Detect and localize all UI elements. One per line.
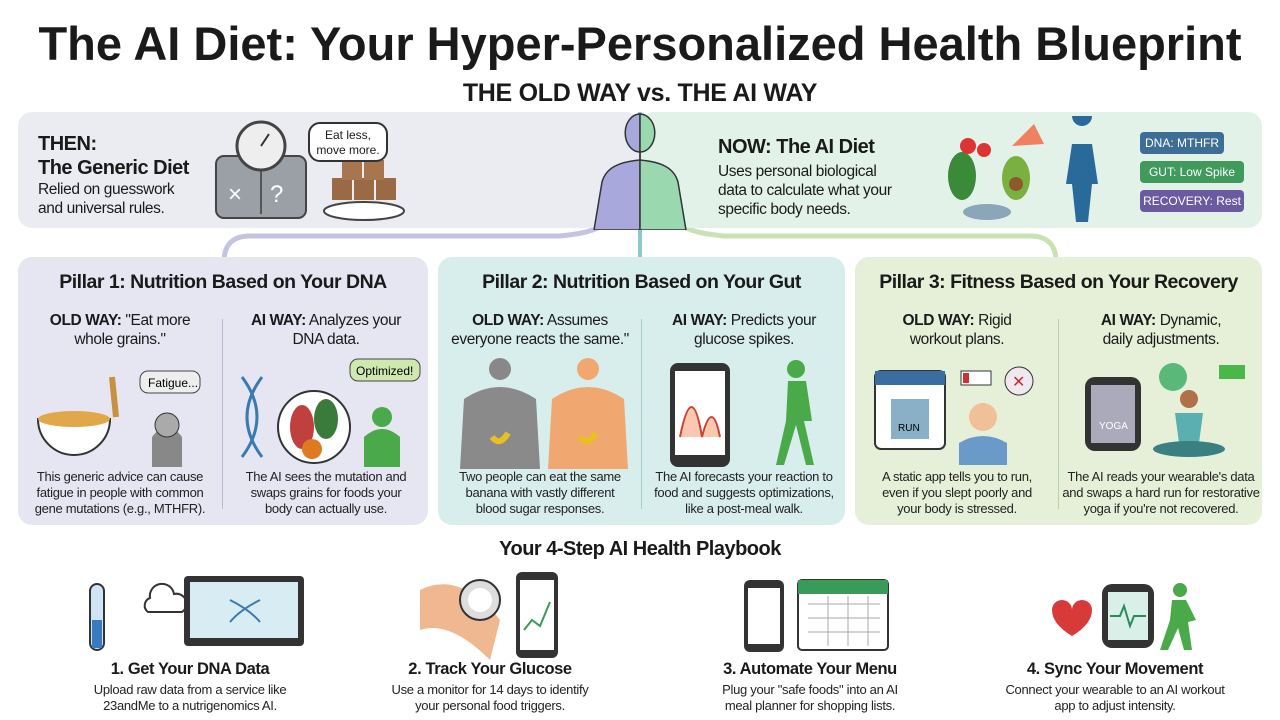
text: p1 ai desc: body can actually use. (265, 501, 387, 516)
text: p2 old desc: Two people can eat the same (459, 469, 621, 484)
text: p3 old desc: even if you slept poorly and (882, 485, 1032, 500)
text: p1 ai desc: swaps grains for foods your (251, 485, 401, 500)
icon: calendar and tired person (874, 366, 1034, 465)
text: step 2: 2. Track Your Glucose (408, 660, 572, 678)
icon: two bodies with bananas (460, 358, 628, 469)
text: p1 ai desc: The AI sees the mutation and (246, 469, 406, 484)
text: p2 ai desc: food and suggests optimizations, (654, 485, 834, 500)
tag: GUT (1140, 161, 1244, 183)
text: step 3: Plug your "safe foods" into an AI (722, 682, 898, 697)
text: step 2: your personal food triggers. (415, 698, 565, 713)
text: p3 ai desc: and swaps a hard run for restorative (1062, 485, 1260, 500)
callout: eat less: Eat less, (325, 128, 371, 142)
heading: pillar 2: Pillar 2: Nutrition Based on Your Gut (482, 271, 801, 293)
text: p2 ai desc: The AI forecasts your reaction to (655, 469, 833, 484)
panel: now (640, 112, 1262, 228)
icon: heart watch runner (1052, 583, 1196, 650)
icon: glucose monitor (420, 572, 558, 660)
text: p1 old desc (35, 469, 205, 516)
text: step 2 (391, 660, 589, 713)
text: p1 old desc: fatigue in people with common (37, 485, 203, 500)
text: p3 ai desc (1062, 469, 1260, 516)
text: p3 old desc: your body is stressed. (897, 501, 1017, 516)
panel: then (18, 112, 640, 228)
text: step 4: 4. Sync Your Movement (1027, 660, 1203, 678)
heading: then: The Generic Diet (38, 157, 189, 179)
text: p1 old way: whole grains." (74, 331, 166, 348)
icon: phone and walker (670, 360, 814, 467)
text: step 1: Upload raw data from a service like (94, 682, 286, 697)
text: p1 old way (50, 312, 190, 348)
callout: eat less (308, 122, 388, 162)
text: step 1: 1. Get Your DNA Data (111, 660, 269, 678)
heading: now: NOW: The AI Diet (718, 136, 874, 158)
icon: calendar and tired person: ✕ (1012, 374, 1025, 391)
text: p1 ai way: DNA data. (292, 331, 360, 348)
text: step 3 (722, 660, 898, 713)
text: step 2: Use a monitor for 14 days to identify (391, 682, 588, 697)
panel: pillar 1 (18, 257, 428, 525)
icon: scale: ? (270, 181, 283, 208)
panel: pillar 3 (855, 257, 1262, 525)
tag: DNA: DNA: MTHFR (1145, 136, 1219, 150)
step 1 (89, 576, 304, 713)
text: p1 old way: OLD WAY: "Eat more (50, 312, 190, 329)
text: step 4: app to adjust intensity. (1054, 698, 1176, 713)
step 3 (722, 579, 898, 713)
icon: bowl and tired person: Fatigue... (148, 376, 198, 390)
text: p1 ai way (251, 312, 402, 348)
panel: pillar 2 (438, 257, 845, 525)
icon: scale: × (228, 181, 242, 208)
text: step 1: 23andMe to a nutrigenomics AI. (103, 698, 277, 713)
text: now: Uses personal biological (718, 163, 876, 180)
text: p3 old way: workout plans. (910, 331, 1004, 348)
heading: playbook: Your 4-Step AI Health Playbook (499, 538, 781, 560)
tag: GUT: GUT: Low Spike (1149, 165, 1235, 179)
text: p2 old way: everyone reacts the same." (451, 331, 629, 348)
icon: bowl and tired person (37, 370, 200, 467)
icon: scale (215, 120, 405, 221)
icon: watch and yoga: YOGA (1099, 421, 1128, 432)
text: now: data to calculate what your (718, 182, 892, 199)
tag: RECOVERY: RECOVERY: Rest (1143, 194, 1241, 208)
text: p3 old desc: A static app tells you to run, (882, 469, 1032, 484)
text: p3 ai desc: yoga if you're not recovered. (1084, 501, 1238, 516)
icon: dna plate person (240, 358, 420, 467)
heading: then (38, 133, 190, 179)
heading: pillar 3: Pillar 3: Fitness Based on Your Recovery (879, 271, 1238, 293)
tag: RECOVERY (1140, 190, 1244, 212)
text: p2 ai way (672, 312, 816, 348)
icon: human silhouette (593, 113, 687, 230)
icon: calendar and tired person: RUN (898, 423, 920, 434)
text: p2 ai desc: like a post-meal walk. (685, 501, 803, 516)
text: step 1 (94, 660, 286, 713)
text: then (38, 181, 175, 217)
callout: eat less: move more. (316, 143, 380, 157)
text: step 4: Connect your wearable to an AI workout (1005, 682, 1225, 697)
text: now: specific body needs. (718, 201, 850, 218)
text: p2 ai way: AI WAY: Predicts your (672, 312, 816, 329)
text: step 4 (1005, 660, 1225, 713)
text: p2 ai way: glucose spikes. (694, 331, 794, 348)
title: The AI Diet: Your Hyper-Personalized Health Blueprint (38, 17, 1242, 70)
text: p1 ai desc (246, 469, 406, 516)
text: p3 ai way: AI WAY: Dynamic, (1101, 312, 1221, 329)
text: p3 ai desc: The AI reads your wearable's data (1068, 469, 1254, 484)
icon: dna upload (89, 576, 304, 651)
text: p2 old desc (459, 469, 621, 516)
icon: foods and body (948, 116, 1098, 222)
tag: DNA (1140, 132, 1224, 154)
text: p3 ai way (1101, 312, 1221, 348)
text: p3 old way (903, 312, 1011, 348)
text: step 3: 3. Automate Your Menu (723, 660, 897, 678)
heading: then: THEN: (38, 133, 97, 155)
icon: dna plate person: Optimized! (356, 364, 413, 378)
subtitle: THE OLD WAY vs. THE AI WAY (463, 79, 817, 107)
text: p2 ai desc (654, 469, 834, 516)
step 2 (391, 572, 589, 713)
text: p1 ai way: AI WAY: Analyzes your (251, 312, 401, 329)
text: p3 ai way: daily adjustments. (1103, 331, 1219, 348)
text: p2 old way: OLD WAY: Assumes (472, 312, 608, 329)
text: p3 old way: OLD WAY: Rigid (903, 312, 1011, 329)
text: p2 old way (451, 312, 629, 348)
heading: pillar 1: Pillar 1: Nutrition Based on Your DNA (59, 271, 387, 293)
text: p1 old desc: gene mutations (e.g., MTHFR). (35, 501, 205, 516)
icon: menu planner (744, 579, 889, 652)
text: p1 old desc: This generic advice can cause (37, 469, 203, 484)
text: now (718, 163, 892, 218)
text: then: and universal rules. (38, 200, 164, 217)
icon: watch and yoga (1085, 363, 1245, 457)
step 4 (1005, 583, 1225, 713)
text: step 3: meal planner for shopping lists. (725, 698, 895, 713)
text: p2 old desc: banana with vastly different (466, 485, 614, 500)
text: p3 old desc (882, 469, 1032, 516)
text: p2 old desc: blood sugar responses. (476, 501, 604, 516)
text: then: Relied on guesswork (38, 181, 174, 198)
